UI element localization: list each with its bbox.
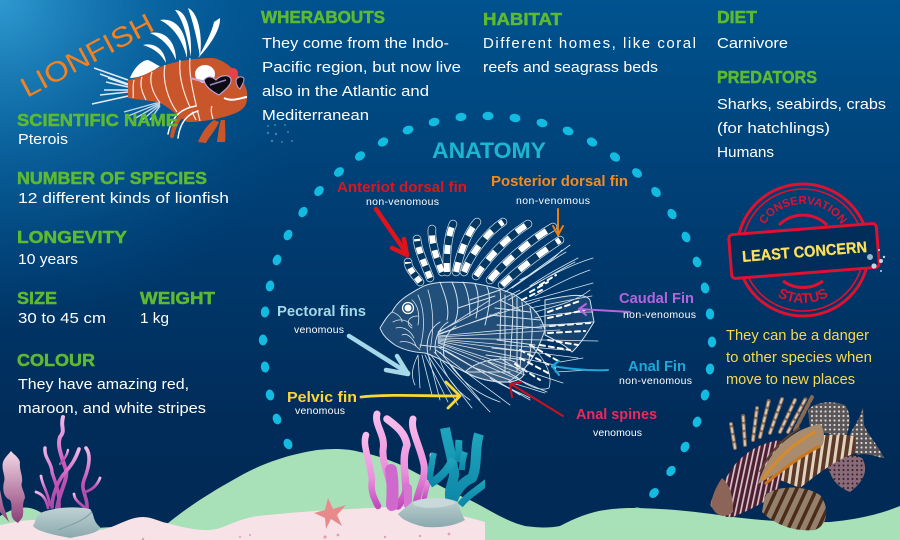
habitat block	[483, 9, 696, 76]
label: caudal fin: non-venomous	[623, 309, 696, 321]
label: anal fin: Anal Fin	[628, 359, 686, 375]
fish eyes	[195, 65, 238, 83]
predators block: PREDATORS	[717, 67, 817, 87]
photo spines	[731, 397, 812, 448]
label: pectoral fins: venomous	[294, 324, 344, 336]
stamp curved text: CONSERVATION	[760, 196, 848, 224]
arrow: anal fin	[552, 361, 608, 375]
caudal fin	[545, 295, 594, 352]
fish stripes	[133, 58, 213, 121]
number of species	[17, 168, 229, 207]
label: anterior dorsal fin	[337, 180, 467, 208]
photo body rear	[775, 435, 856, 488]
anatomy line-art lionfish	[380, 222, 598, 412]
stamp rings	[737, 184, 869, 316]
habitat block: Different homes, like coral	[483, 35, 696, 52]
dorsal spine flag interiors	[408, 222, 560, 285]
left column facts	[17, 110, 229, 417]
gill	[420, 322, 456, 356]
pectoral rays	[412, 290, 598, 412]
lionfish photo	[710, 397, 884, 530]
dorsal spine flag outlines	[408, 222, 560, 285]
arrow: posterior dorsal fin	[553, 209, 563, 235]
danger note: move to new places	[726, 371, 855, 388]
whereabouts block: They come from the Indo-	[262, 35, 449, 52]
eye	[402, 302, 414, 314]
habitat block: HABITAT	[483, 9, 562, 29]
fish tail	[92, 68, 128, 104]
arrow: caudal fin	[579, 304, 630, 315]
whereabouts block: also in the Atlantic and	[262, 83, 429, 100]
arrow: anterior dorsal fin	[376, 209, 407, 255]
label: posterior dorsal fin	[491, 174, 628, 207]
size: SIZE	[17, 288, 57, 308]
danger note	[726, 327, 872, 388]
photo upper pectoral	[758, 424, 824, 484]
predators block	[717, 67, 886, 161]
size	[17, 288, 106, 327]
weight: WEIGHT	[140, 288, 215, 308]
label: anal spines	[576, 407, 657, 439]
arrow: anal spines	[510, 382, 563, 416]
photo lower pectoral	[762, 488, 826, 530]
title: LIONFISH	[15, 7, 159, 103]
longevity	[17, 227, 127, 268]
whereabouts block: Pacific region, but now live	[262, 59, 461, 76]
conservation status stamp	[727, 182, 886, 318]
seaweed: pink left	[36, 417, 100, 508]
label: caudal fin: Caudal Fin	[619, 291, 694, 307]
whereabouts block: WHERABOUTS	[261, 7, 385, 27]
danger note: to other species when	[726, 349, 872, 366]
photo tail	[850, 407, 884, 458]
seaweed: pink centre	[365, 414, 432, 506]
colour	[17, 350, 206, 417]
stamp status text: LEAST CONCERN	[742, 239, 868, 266]
label: anal fin: non-venomous	[619, 375, 692, 387]
label: posterior dorsal fin: Posterior dorsal fin	[491, 174, 628, 190]
rock left	[33, 507, 100, 538]
whereabouts block	[261, 7, 461, 124]
fish sunglasses	[190, 76, 244, 95]
scientific name: SCIENTIFIC NAME	[17, 110, 178, 130]
colour: They have amazing red,	[18, 376, 189, 393]
danger note: They can be a danger	[726, 327, 869, 344]
fish legs	[198, 120, 225, 143]
sand speckles	[142, 533, 450, 540]
cartoon lionfish	[92, 8, 247, 143]
lower rays	[490, 345, 590, 398]
photo body front	[710, 440, 783, 517]
body outline	[380, 282, 545, 382]
longevity: 10 years	[18, 251, 78, 268]
label: pectoral fins	[277, 304, 366, 336]
fish mouth	[224, 97, 247, 100]
head detail	[392, 290, 433, 350]
colour: COLOUR	[17, 350, 95, 370]
diet block	[717, 7, 788, 52]
predators block: Humans	[717, 144, 774, 161]
body stripes	[440, 282, 542, 372]
label: pectoral fins: Pectoral fins	[277, 304, 366, 320]
habitat block: reefs and seagrass beds	[483, 59, 658, 76]
label: anal spines: Anal spines	[576, 407, 657, 423]
scientific name: Pterois	[18, 131, 68, 148]
label: anterior dorsal fin: Anteriot dorsal fin	[337, 180, 467, 196]
diet block: Carnivore	[717, 35, 788, 52]
fish body	[128, 58, 247, 122]
rock right	[398, 498, 465, 527]
weight	[140, 288, 215, 327]
coral: teal	[430, 428, 492, 505]
dorsal white bands	[408, 222, 560, 285]
fish pectoral	[168, 106, 198, 138]
label: pelvic fin	[287, 390, 357, 417]
anatomy dotted circle	[259, 112, 716, 519]
longevity: LONGEVITY	[17, 227, 127, 247]
fish lower fin	[124, 102, 160, 121]
caudal white bands	[515, 275, 590, 380]
label: anal fin	[619, 359, 692, 387]
weight: 1 kg	[140, 310, 169, 327]
rays towards the back	[505, 245, 594, 325]
label: caudal fin	[619, 291, 696, 321]
colour: maroon, and white stripes	[18, 400, 206, 417]
photo rear dorsal fin	[808, 402, 850, 437]
anatomy heading: ANATOMY	[432, 138, 546, 163]
seabed: green hills	[0, 449, 900, 540]
scientific name	[17, 110, 178, 148]
small bubbles	[267, 124, 293, 143]
label: pelvic fin: Pelvic fin	[287, 390, 357, 406]
predators block: (for hatchlings)	[717, 120, 830, 137]
predators block: Sharks, seabirds, crabs	[717, 96, 886, 113]
seaweed: mauve left	[0, 451, 25, 523]
arrow: pelvic fin	[361, 382, 460, 408]
number of species: NUMBER OF SPECIES	[17, 168, 207, 188]
starfish	[314, 498, 346, 529]
fish fins and spines	[130, 8, 220, 78]
size: 30 to 45 cm	[18, 310, 106, 327]
anal fin	[465, 358, 524, 382]
label: pelvic fin: venomous	[295, 405, 345, 417]
seabed: pink sand	[0, 507, 485, 540]
stamp band	[729, 223, 879, 279]
arrow: pectoral fins	[349, 336, 408, 374]
stamp bubbles	[867, 249, 885, 272]
label: anterior dorsal fin: non-venomous	[366, 196, 439, 208]
diet block: DIET	[717, 7, 757, 27]
whereabouts block: Mediterranean	[262, 107, 369, 124]
number of species: 12 different kinds of lionfish	[18, 190, 229, 207]
conservation status stamp: STATUS	[778, 288, 828, 304]
label: anal spines: venomous	[593, 427, 642, 439]
label: posterior dorsal fin: non-venomous	[516, 195, 590, 207]
photo rear anal fin	[828, 456, 865, 492]
photo head	[711, 478, 733, 516]
